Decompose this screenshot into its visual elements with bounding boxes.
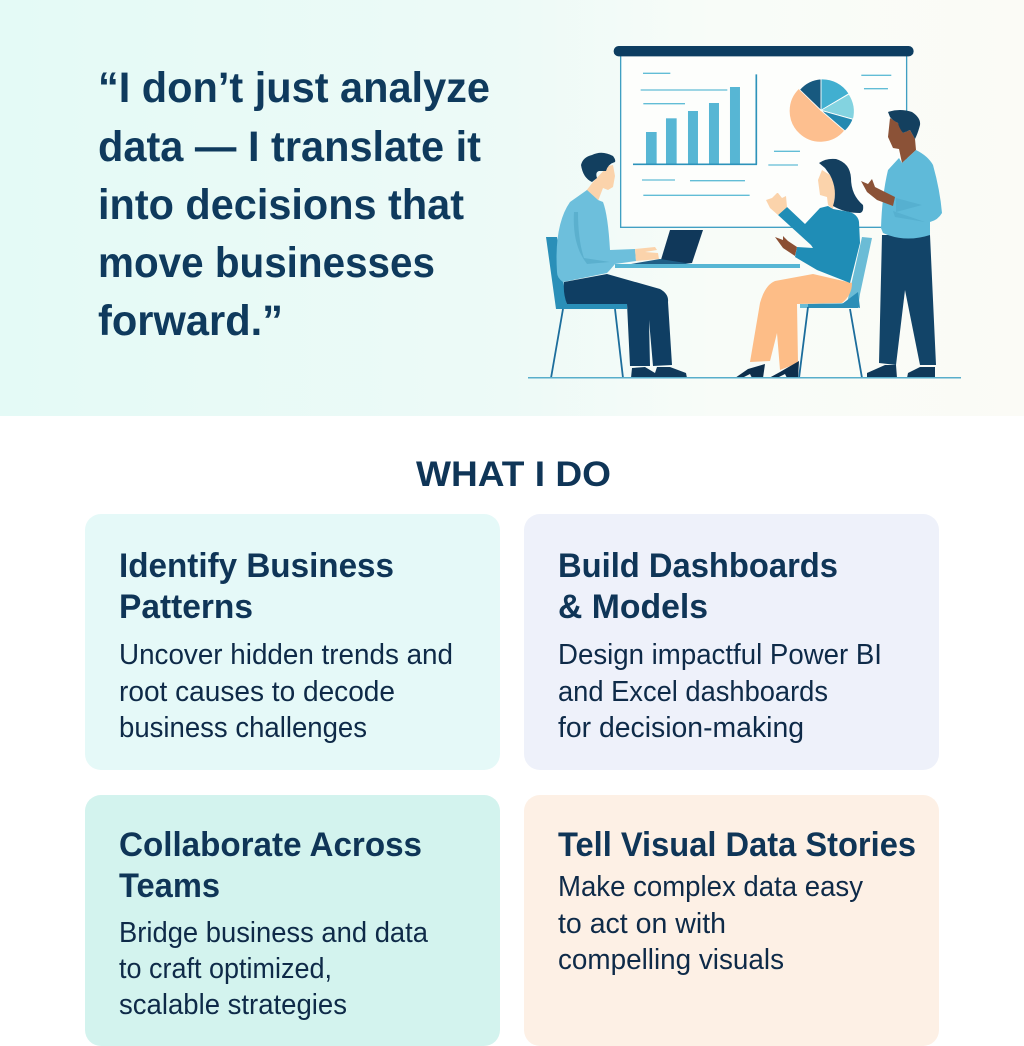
hero background [0,0,1024,416]
floor line [528,377,961,378]
bar chart [633,74,757,165]
panel: build dashboards and models: Design impactful Power BI [558,639,882,671]
panel: identify business patterns: business challenges [119,712,367,744]
panel: build dashboards and models: and Excel dashboards [558,676,828,708]
quote heading: into decisions that [98,181,464,229]
panel: identify business patterns [85,514,500,770]
panel: identify business patterns: Uncover hidden trends and [119,639,453,671]
person: seated woman [735,159,872,378]
panel: tell visual data stories: to act on with [558,908,726,940]
panel: collaborate across teams: scalable strategies [119,989,347,1021]
presentation screen [614,46,914,227]
panel: tell visual data stories: compelling visuals [558,944,784,976]
panel: build dashboards and models [524,514,939,770]
panel: build dashboards and models: for decision-making [558,712,804,744]
person: man seated with laptop [546,153,687,378]
quote heading [98,64,490,345]
panel: tell visual data stories: Tell Visual Data Stories [558,826,916,864]
panel: collaborate across teams: Collaborate Across [119,826,422,864]
quote heading: move businesses [98,239,435,287]
panel: collaborate across teams: to craft optimized, [119,953,332,985]
panel: identify business patterns: root causes to decode [119,676,395,708]
panel: identify business patterns: Identify Business [119,547,394,585]
quote heading: forward.” [98,297,283,345]
panel: collaborate across teams: Teams [119,867,220,905]
illustration: team discussing data at a presentation screen [528,46,961,378]
panel: tell visual data stories [524,795,939,1046]
quote heading: “I don’t just analyze [98,64,490,112]
quote heading: data — I translate it [98,123,481,171]
panel: tell visual data stories: Make complex data easy [558,871,864,903]
pie chart [789,79,854,142]
panel: collaborate across teams: Bridge business and data [119,917,428,949]
person: standing man [861,110,942,378]
panel: build dashboards and models: & Models [558,588,708,626]
section heading: WHAT I DO [416,455,611,494]
panel: collaborate across teams [85,795,500,1046]
panel: build dashboards and models: Build Dashboards [558,547,838,585]
panel: identify business patterns: Patterns [119,588,253,626]
laptop [631,230,703,264]
table [615,264,800,268]
